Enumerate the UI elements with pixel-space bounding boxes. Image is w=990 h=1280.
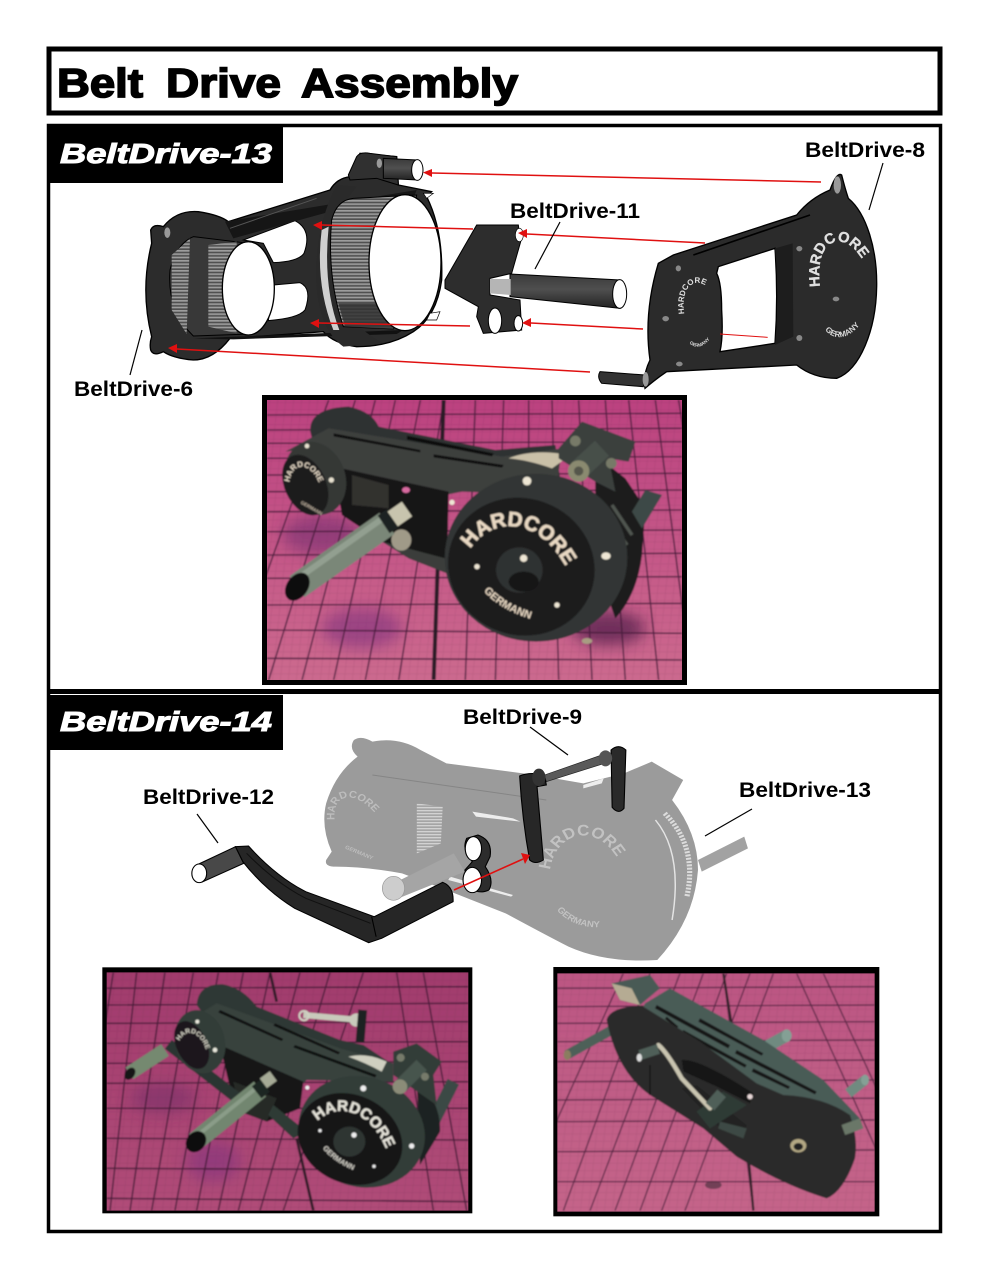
photo: finished unit with both handles: HARDCORE <box>310 1098 397 1150</box>
title bar: Assembly <box>301 60 518 106</box>
part: clamp rings <box>463 835 491 893</box>
label: BeltDrive-11: BeltDrive-11 <box>510 199 640 223</box>
photo: rear view of finished unit <box>537 965 897 1216</box>
label: BeltDrive-8 <box>805 138 925 210</box>
label: BeltDrive-11 <box>510 199 640 269</box>
label: BeltDrive-9 <box>463 705 582 755</box>
photo: finished belt drive, front view: HARDCORE <box>283 460 325 484</box>
exploded part: side plate BeltDrive-8 <box>598 174 878 390</box>
panel frame <box>48 126 941 1232</box>
label: BeltDrive-8: BeltDrive-8 <box>805 138 925 162</box>
exploded part: side plate BeltDrive-8: HARDCORE <box>808 232 870 286</box>
exploded part: bracket with shaft BeltDrive-11 <box>445 225 627 333</box>
section tab: BeltDrive-14 <box>50 695 283 750</box>
top bracket <box>348 153 398 185</box>
ghosted assembly: HARDCORE <box>538 824 626 869</box>
belt <box>225 190 417 238</box>
photo: finished unit with both handles <box>102 967 472 1214</box>
part: BeltDrive-12 crank <box>192 846 453 943</box>
photo: finished belt drive, front view: HARDCORE <box>458 510 578 567</box>
photo: finished unit with both handles: HARDCORE <box>174 1027 212 1050</box>
label: BeltDrive-13: BeltDrive-13 <box>739 778 871 802</box>
white gaps between the pulleys <box>243 221 307 263</box>
large pulley <box>316 185 383 347</box>
section tab: BeltDrive-13: BeltDrive-13 <box>60 138 273 169</box>
label: BeltDrive-9: BeltDrive-9 <box>463 705 582 729</box>
photo: finished unit with both handles: GERMANN <box>322 1144 356 1171</box>
title bar: Drive <box>166 60 281 106</box>
ghosted assembly: GERMANY <box>558 907 600 928</box>
label: BeltDrive-6: BeltDrive-6 <box>74 377 193 401</box>
ghosted assembly: HARDCORE <box>326 791 380 820</box>
ghosted assembly <box>324 738 748 960</box>
small pulley drum <box>170 237 250 336</box>
section tab: BeltDrive-13 <box>50 127 283 183</box>
part: BeltDrive-9 crank <box>520 747 626 862</box>
label: BeltDrive-12: BeltDrive-12 <box>143 785 274 809</box>
photo: finished belt drive, front view <box>262 395 687 685</box>
title bar: Belt <box>57 60 143 106</box>
red assembly arrows, top <box>168 169 821 372</box>
label: BeltDrive-12 <box>143 785 274 843</box>
exploded part: side plate BeltDrive-8: GERMANY <box>690 337 709 347</box>
exploded part: side plate BeltDrive-8: GERMANY <box>826 322 858 338</box>
photo: finished belt drive, front view: GERMANN <box>300 500 324 517</box>
label: BeltDrive-13 <box>705 778 871 836</box>
photo: finished belt drive, front view: GERMANN <box>484 586 533 620</box>
ghosted assembly: GERMANY <box>344 845 374 862</box>
red arrow to crank socket <box>454 853 530 890</box>
exploded part: side plate BeltDrive-8: HARDCORE <box>678 277 707 314</box>
ghosted belt drive with crank handles <box>191 738 748 960</box>
exploded part: pulley assembly BeltDrive-6 <box>146 153 442 360</box>
label: BeltDrive-6 <box>74 330 193 401</box>
title bar <box>49 49 940 113</box>
section tab: BeltDrive-14: BeltDrive-14 <box>60 706 273 737</box>
